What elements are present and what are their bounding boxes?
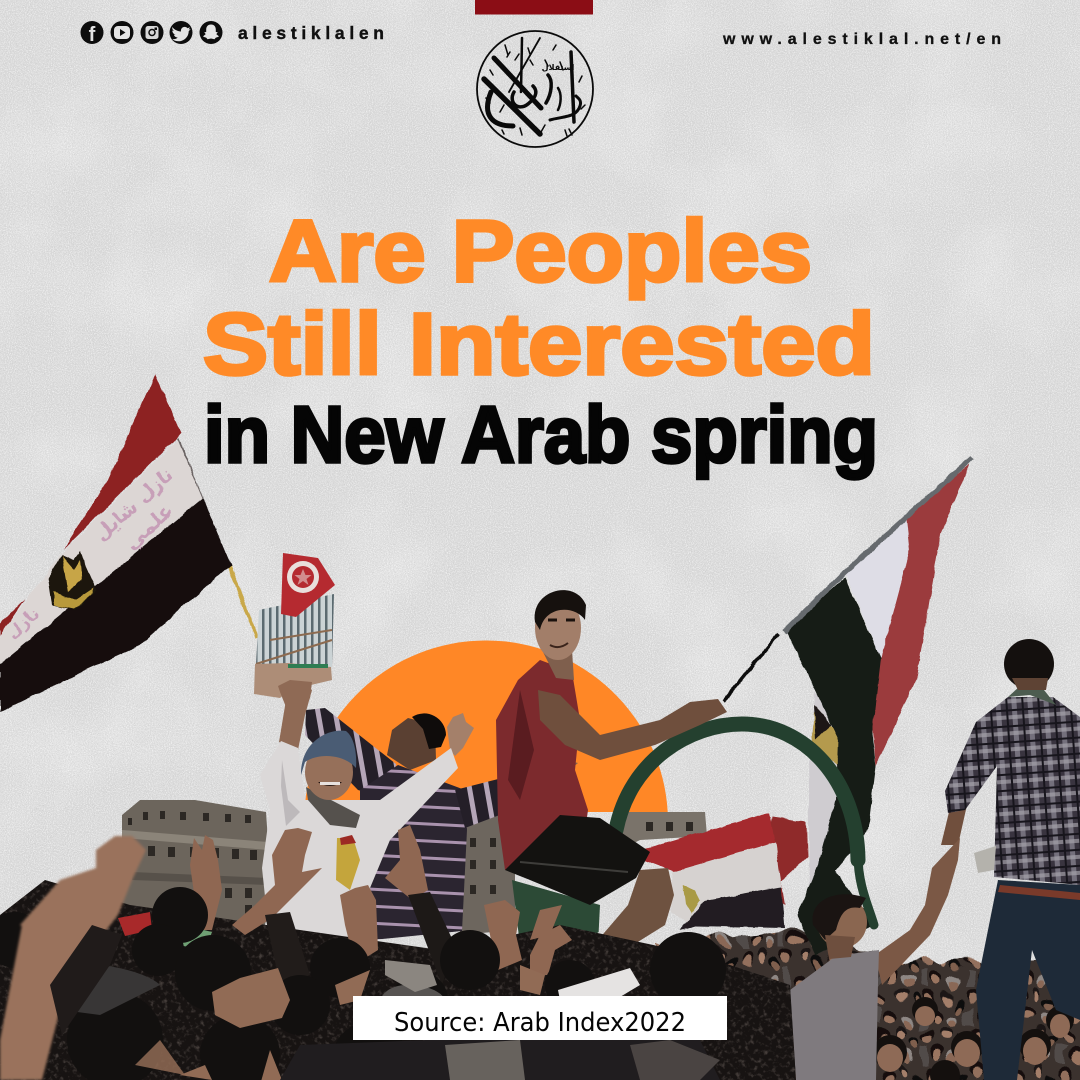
sleeve bbox=[455, 767, 545, 828]
icon: youtube bbox=[110, 21, 134, 44]
building: centre-right block bbox=[460, 812, 707, 935]
red hat bbox=[118, 912, 152, 936]
torso bbox=[360, 765, 467, 940]
website url: www.alestiklal.net/en bbox=[722, 31, 1001, 48]
hand: tall centre bbox=[190, 835, 222, 930]
handwriting on flag: نازل bbox=[4, 604, 42, 642]
red stripe bbox=[628, 813, 776, 873]
arm bbox=[0, 900, 92, 1080]
head bbox=[817, 896, 867, 948]
flagstick bbox=[724, 634, 778, 701]
icon: twitter bbox=[170, 21, 192, 44]
left egyptian flag bbox=[0, 374, 257, 712]
head bbox=[1004, 639, 1054, 689]
hair masses bbox=[0, 887, 726, 1080]
handwriting on flag: نازل شايل bbox=[90, 463, 178, 545]
hand: right of fist bbox=[530, 925, 572, 975]
icon: snapchat bbox=[200, 21, 222, 44]
scarf bbox=[306, 787, 360, 828]
open hand at sleeve end bbox=[540, 744, 578, 785]
source label bbox=[353, 996, 727, 1040]
lower white fold with eagle bbox=[809, 693, 860, 900]
leg bbox=[598, 868, 674, 950]
head bbox=[305, 744, 353, 800]
man in grey t-shirt bbox=[790, 838, 960, 1080]
green tube arc bbox=[616, 724, 874, 925]
scarf bbox=[1008, 685, 1056, 705]
arm bbox=[538, 690, 727, 760]
red stripe bbox=[63, 374, 181, 550]
plaid shirt bbox=[945, 697, 1080, 885]
shirt bbox=[260, 741, 458, 958]
cuff bbox=[178, 925, 212, 950]
forearm bbox=[941, 805, 967, 845]
hand: front bbox=[340, 885, 378, 960]
green seat bbox=[512, 880, 600, 945]
grey caps bbox=[62, 964, 160, 1015]
hand raised bbox=[447, 713, 474, 756]
white stripe bbox=[0, 440, 203, 664]
raised arm bbox=[875, 838, 960, 985]
back arm bbox=[305, 708, 396, 800]
larger faces in right crowd bbox=[720, 997, 1074, 1080]
flag hem bbox=[784, 458, 972, 632]
right egyptian flag bbox=[724, 458, 972, 955]
cage bbox=[256, 594, 334, 667]
small egyptian flags behind bbox=[628, 813, 808, 930]
social handle: alestiklalen bbox=[238, 23, 384, 43]
title bbox=[203, 203, 878, 479]
orange sun circle bbox=[304, 640, 668, 812]
sock bbox=[590, 932, 622, 958]
shorts bbox=[505, 815, 650, 905]
sleeves bbox=[265, 912, 310, 985]
beanie bbox=[301, 731, 356, 775]
raised arm bbox=[279, 680, 312, 750]
icon: facebook: f bbox=[89, 24, 96, 46]
flag pole bbox=[229, 565, 257, 638]
white stripe bbox=[671, 842, 782, 925]
head bbox=[387, 713, 446, 770]
back red flag bbox=[760, 817, 808, 905]
black stripe bbox=[0, 498, 231, 712]
icon: facebook bbox=[80, 21, 104, 46]
social media icons bbox=[80, 21, 222, 46]
bottom dark fabric bbox=[280, 1040, 720, 1080]
man in plaid shirt on the right bbox=[941, 639, 1080, 1080]
hand: sleeve right bbox=[385, 825, 428, 900]
fist bbox=[484, 900, 522, 970]
hand big bbox=[20, 836, 146, 950]
head and neck bbox=[542, 650, 574, 680]
white-shirt man with cage bbox=[260, 680, 458, 958]
source label: Source: Arab Index2022 bbox=[394, 1008, 686, 1038]
jacket sleeve bbox=[50, 925, 122, 1035]
white fabric bit bbox=[558, 968, 640, 1000]
title line 3: in New Arab spring bbox=[204, 390, 878, 479]
logo: round calligraphy seal: استقلال bbox=[542, 63, 575, 72]
title line 2: Still Interested bbox=[203, 296, 875, 393]
bird cage with tunisian flag bbox=[254, 553, 335, 714]
dark crowd base bbox=[0, 880, 796, 1080]
large blurred hands foreground bbox=[0, 836, 146, 1080]
eagle bbox=[683, 885, 700, 913]
faces bbox=[135, 965, 545, 1080]
icon: instagram bbox=[140, 21, 164, 44]
jeans bbox=[976, 880, 1080, 1080]
building: left block bbox=[120, 800, 272, 935]
logo: round calligraphy seal bbox=[477, 31, 593, 147]
white stripe bbox=[845, 515, 910, 658]
red stripe bbox=[872, 464, 970, 766]
seated man in red shirt bbox=[496, 590, 727, 958]
paper in pocket bbox=[974, 846, 996, 873]
top red tab bbox=[475, 0, 593, 14]
shirt print bbox=[336, 838, 360, 890]
black stripe bbox=[786, 577, 881, 955]
striped-shirt man bbox=[305, 708, 578, 940]
handwriting on flag: علمي bbox=[119, 498, 178, 555]
shirt bbox=[496, 660, 588, 870]
hand holding cage bbox=[278, 680, 312, 714]
tunisian flag bbox=[281, 553, 335, 617]
handwriting on flag bbox=[4, 463, 178, 642]
back crowd far right bbox=[660, 930, 1080, 1080]
eagle emblem bbox=[48, 552, 97, 610]
title line 1: Are Peoples bbox=[269, 203, 812, 300]
cage base bbox=[254, 663, 332, 698]
curly hair texture bbox=[0, 880, 800, 1080]
front crowd left bbox=[0, 825, 800, 1080]
shirt bbox=[790, 950, 879, 1080]
black stripe bbox=[680, 887, 785, 930]
hand: over white shirt bbox=[232, 828, 322, 935]
raised hands and arms bbox=[190, 825, 572, 975]
